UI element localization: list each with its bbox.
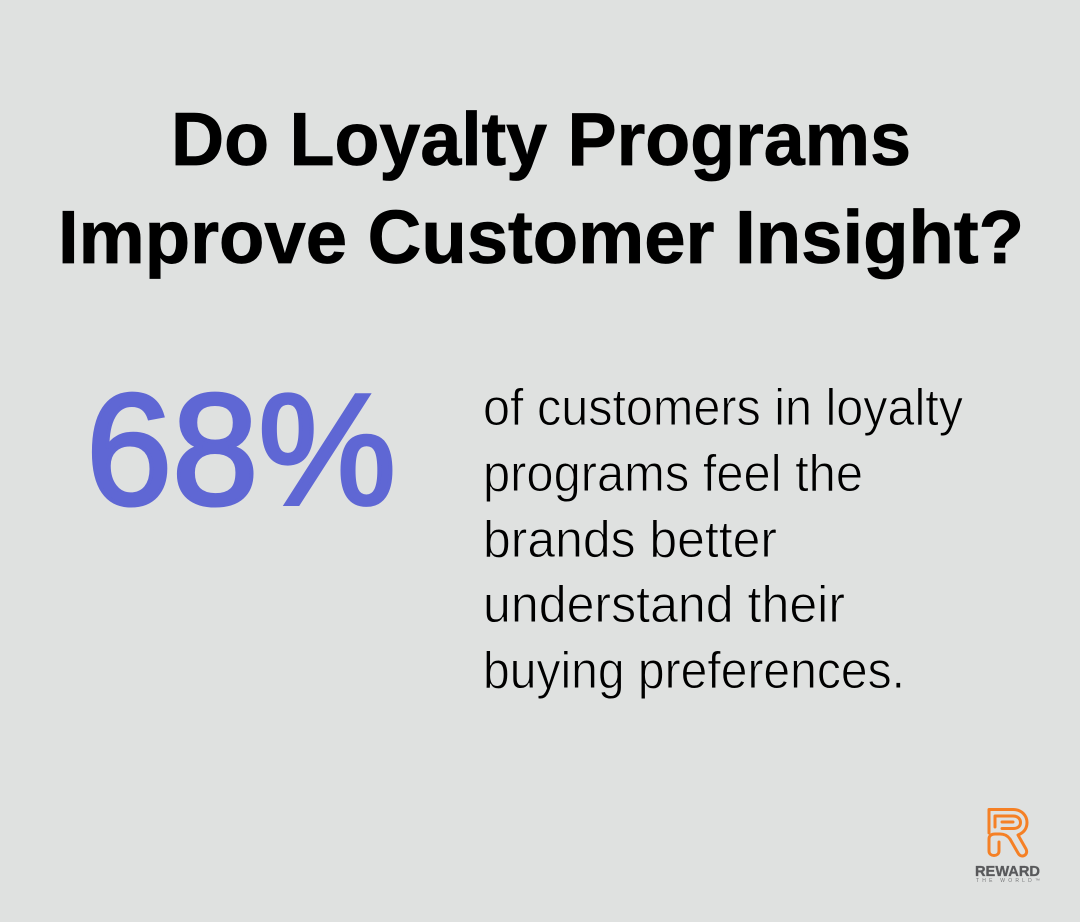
logo tagline: THE WORLD™ bbox=[976, 878, 1040, 884]
logo wordmark: REWARD bbox=[975, 864, 1040, 880]
statistic description: understand their bbox=[483, 576, 845, 634]
title bbox=[58, 97, 1024, 279]
icon: orange R mark bbox=[989, 810, 1027, 856]
statistic description: brands better bbox=[483, 511, 777, 569]
title: Do Loyalty Programs bbox=[171, 97, 911, 181]
statistic description bbox=[483, 379, 963, 700]
statistic description: of customers in loyalty bbox=[483, 379, 963, 437]
statistic description: programs feel the bbox=[483, 445, 863, 503]
statistic description: buying preferences. bbox=[483, 642, 905, 700]
statistic: 68%: 68% bbox=[86, 362, 396, 538]
title: Improve Customer Insight? bbox=[58, 195, 1024, 279]
logo: Reward the World bbox=[975, 810, 1040, 884]
